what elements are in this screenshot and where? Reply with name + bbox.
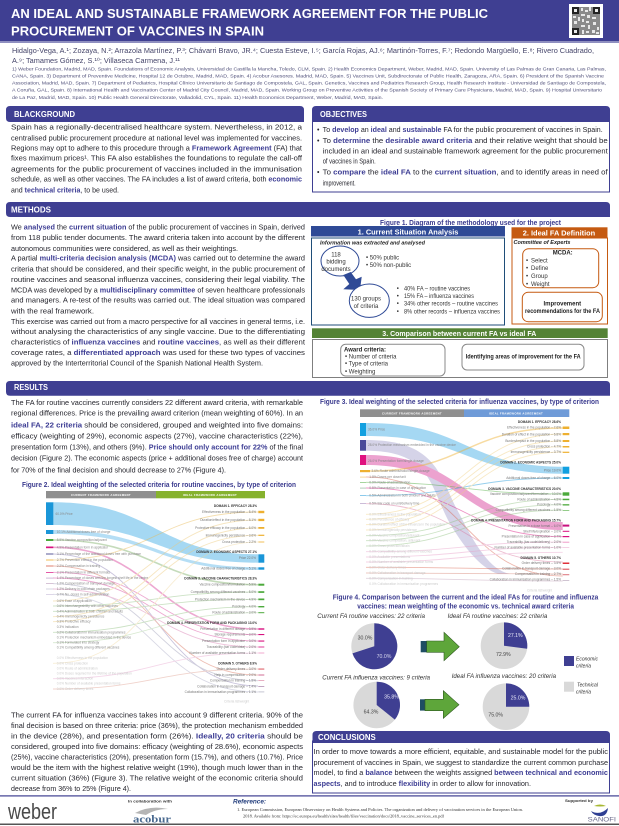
left labels: 0.5% Bar code on unit/delivery time xyxy=(369,502,420,506)
heading: background xyxy=(6,106,304,122)
pie: ideal routine: 27.1% xyxy=(508,633,523,639)
left labels: 26.0% Presentation form/single-dosage xyxy=(368,459,424,463)
text block: results routine: for 70% of the final decision and should decrease to 27% (Figure 4). xyxy=(11,467,226,474)
text block: methods: and managers. A re-test of the results was carried out. The ideal situation was compared xyxy=(11,298,305,305)
text block: background: fixes maximum prices¹. This FA also establishes the foundations to regulate the call-off xyxy=(11,156,302,163)
left labels: 0.0% Effectiveness in the population xyxy=(57,656,108,660)
footer xyxy=(0,795,619,826)
logo: sanofi: SANOFI xyxy=(588,817,616,824)
left labels: 4.9% Presentation form in applicator xyxy=(57,545,109,549)
right labels: Route of administration – 3.0% xyxy=(212,611,256,615)
panel: conclusions xyxy=(312,731,610,793)
figure 3: influenza vaccines sankey: IDEAL FRAMEWORK AGREEMENT xyxy=(489,412,543,416)
left labels: 3.6% Route administration/single-dosage xyxy=(372,469,430,473)
left labels: 0.0% Duration effect of the influenza in the population xyxy=(369,523,445,527)
panel: current situation analysis: 40% FA – routine vaccines xyxy=(404,287,470,293)
figure 4 title: vaccines: mean weighting of the economic vs. technical award criteria xyxy=(357,602,575,610)
text block: methods: coverage rates, a differentiated approach was used for these two types of vaccines xyxy=(11,350,306,357)
right labels: Additional doses free of charge – 6.0% xyxy=(506,476,561,480)
panel: current situation analysis: • xyxy=(397,302,399,308)
figure 3: influenza vaccines sankey: CURRENT FRAMEWORK AGREEMENT xyxy=(382,412,442,416)
panel: current situation analysis: 118 xyxy=(331,252,341,258)
text block: results routine: ideal FA, 22 criteria should be considered, grouped and weighted into five domains: xyxy=(11,422,303,429)
logo: acobur: acobur xyxy=(133,814,171,826)
right labels: Presentation form in applicator – 3.0% xyxy=(202,639,256,643)
panel: current situation analysis: of criteria xyxy=(354,304,379,310)
left labels: 0.6% Interchangeability with other vaccines xyxy=(57,604,118,608)
right labels xyxy=(167,504,257,704)
left labels: 0.0% Order delivery times xyxy=(369,565,406,569)
logo: acobur: In collaboration with xyxy=(128,800,172,804)
logo: sanofi: Supported by xyxy=(565,799,593,803)
panel: background xyxy=(6,106,304,194)
right labels: Posology – 4.0% xyxy=(232,605,256,609)
right labels: DOMAIN 4. PRESENTATION FORM AND PACKAGING 13.0% xyxy=(167,621,257,625)
text block: results routine xyxy=(11,400,303,474)
affiliations xyxy=(12,67,606,101)
right labels: Vaccine composition/formulation – 5.9% xyxy=(200,583,256,587)
left labels: 0.2% Collaboration in immunisation programmes xyxy=(57,630,126,634)
left labels: 3.1% Percentage of the additional doses free with purchase xyxy=(57,552,141,556)
right bars xyxy=(563,426,569,580)
reference: 2018. Available from: https://ec.europa.eu/health/sites/health/files/vaccination/docs/2018_vaccine_services_en.pdf xyxy=(243,815,445,819)
panel: ideal FA definition: Improvement xyxy=(543,301,581,307)
text block: objectives: • xyxy=(317,138,320,145)
panel: current situation analysis: bidding xyxy=(326,260,346,266)
panel: current situation analysis: Information was extracted and analysed xyxy=(320,240,425,246)
heading: background: BLACKGROUND xyxy=(14,110,75,119)
pie: current routine: 30.0% xyxy=(358,636,373,642)
title xyxy=(11,7,488,38)
panel: ideal FA definition: recommendations for the FA xyxy=(525,309,601,315)
affiliations: Association, Madrid, MAD, Spain. 7) Department of Pediatrics, Hospital Clínico Universitario de Santiago de Compostela, GAL, Spain. Genetics, Vaccines and Pediatrics Research Group, Health Research Institute - Universidad de Santiago de Compostela, xyxy=(12,80,606,86)
left labels: 0.0% Collaboration in transport damage xyxy=(369,571,426,575)
left labels: 10.1% Additional doses free of charge xyxy=(57,530,111,534)
left labels: 0.4% Immunogenicity persistence xyxy=(57,615,105,619)
text block: methods xyxy=(10,225,306,368)
right labels: Number of available presentation forms – 1.1% xyxy=(190,651,256,655)
heading: objectives xyxy=(312,106,610,122)
left labels: 0.1% Compatibility among different vaccines xyxy=(57,646,120,650)
figure 2: routine vaccines sankey xyxy=(22,480,296,704)
right labels: Route of administration – 4.5% xyxy=(517,497,561,501)
text block: results routine: regional differences. Price is the prevailing award criterion (mean weighting of 60%). In an xyxy=(11,411,303,418)
figure 4 title xyxy=(333,592,599,610)
text block: objectives: • xyxy=(317,170,320,177)
pie: ideal routine: Ideal FA routine vaccines: 22 criteria xyxy=(448,613,548,620)
left labels: 0.0% Persistence of efficacy xyxy=(369,517,410,521)
heading: results xyxy=(6,381,610,396)
panel: current situation analysis: • 50% non-public xyxy=(366,263,411,269)
panel: ideal FA definition xyxy=(512,227,608,324)
text block: results routine: efficacy (weighting of 29%), economic aspects (27%), vaccine characteristics (22%), xyxy=(11,433,303,440)
panel: comparison: Award criteria: xyxy=(344,347,386,353)
panel: ideal FA definition: Define xyxy=(531,266,549,272)
right labels: Storage requirements – 3.0% xyxy=(215,633,256,637)
text block: background xyxy=(11,125,302,194)
authors xyxy=(12,48,594,65)
panel: current situation analysis: 1. Current Situation Analysis xyxy=(358,227,458,236)
text block: results influenza: would be the item with the highest relative weight (19%), though much lower than in the xyxy=(10,765,303,772)
right labels: Presentation in different dosage – 3.9% xyxy=(200,627,256,631)
legend xyxy=(564,656,599,696)
left labels: 0.4% Administration in both children and adults xyxy=(57,609,123,613)
right labels: Presentation in case of application – 3.7% xyxy=(502,535,561,539)
panel: current situation analysis: • 50% public xyxy=(366,256,399,262)
text block: background: Regions may opt to adhere to this procedure through a Framework Agreement (FA) that xyxy=(11,146,302,153)
text block: conclusions: model, to find a balance between the weights assigned between technical and economic xyxy=(314,770,608,777)
left labels: 1.2% Compensation of transport damage xyxy=(57,582,115,586)
header banner xyxy=(0,0,619,43)
pie: current influenza xyxy=(322,674,431,728)
right labels: Order delivery times – 3.0% xyxy=(217,667,256,671)
affiliations: CANA, Spain. 3) Department of Preventive Medicine, Hospital 12 de Octubre, Madrid, MAD, Spain. 4) Acobur Asesores. Madrid, MAD, Spain. 5) Vaccines Unit, Subdirectorate of Public Health, Zaragoza, ARA, Spain. 6) President of the Spanish Vaccine xyxy=(12,74,604,80)
title: AN IDEAL AND SUSTAINABLE FRAMEWORK AGREEMENT FOR THE PUBLIC xyxy=(11,7,488,21)
heading: conclusions xyxy=(312,731,610,743)
panel: current situation analysis xyxy=(311,226,505,325)
right labels: Burden/impact in the population – 5.8% xyxy=(505,439,561,443)
right labels: Criteria list/weight xyxy=(527,588,552,592)
right labels: Cross protection – 4.7% xyxy=(527,445,561,449)
left labels: 0.0% Available presentations xyxy=(369,555,411,559)
left labels: 1.4% Percentage of doses with the longest shelf life in the centre xyxy=(57,576,148,580)
right labels: Compensation in training – 2.7% xyxy=(515,572,561,576)
panel: ideal FA definition: • xyxy=(526,259,528,265)
legend: criteria xyxy=(576,663,591,669)
right labels: Compatibility among different vaccines – 5.0% xyxy=(191,590,256,594)
text block: methods: We analysed the current situation of the public procurement of vaccines in Spain, derived xyxy=(11,225,305,232)
right labels: Collaboration in immunisation programmes – 1.1% xyxy=(185,690,256,694)
text block: objectives: • xyxy=(317,127,320,134)
text block: background: and technical criteria, to be used. xyxy=(11,187,119,194)
logo: weber: weber xyxy=(7,799,57,824)
right labels: Posology – 4.0% xyxy=(537,503,561,507)
text block: objectives: improvement. xyxy=(323,181,356,188)
panel: comparison: • Type of criteria xyxy=(345,362,389,368)
affiliations: de La Paz, Madrid, MAD, Spain. 10) Public Health General Directorate, Valladolid, CYL, Spain. 11) Health Economics Department, Weber, Madrid, MAD, Spain. xyxy=(12,95,383,101)
text block: conclusions: procurement of vaccines in Spain, we suggest to standardize the current common purchase xyxy=(314,760,608,767)
authors: A.⁹; Tamames Gómez, S.¹⁰; Villaseca Carmena, J.¹¹ xyxy=(12,57,181,65)
arrow: influenza current to ideal xyxy=(420,691,459,718)
text block: methods: criteria that should be considered, and their specific weight, in the public procurement of xyxy=(11,266,305,273)
arrow: routine current to ideal xyxy=(421,632,459,661)
right labels: Additional doses free of charge – 5.1% xyxy=(201,567,256,571)
right labels xyxy=(471,420,561,592)
pie: ideal influenza: Ideal FA influenza vaccines: 20 criteria xyxy=(452,673,557,680)
right labels: Collaboration in transport damage – 1.4% xyxy=(197,684,256,688)
pie: ideal influenza xyxy=(452,673,557,730)
right labels: Order delivery times – 3.5% xyxy=(522,561,561,565)
left labels: 2.1% Presentation in different formats xyxy=(57,570,110,574)
left labels: 1.8% Doses per dose/unit xyxy=(369,475,406,479)
left labels: 2.2% Compensation in training xyxy=(57,564,100,568)
panel: current situation analysis: 130 groups xyxy=(351,296,381,302)
text block: results influenza: in the device (28%), and presentation form (26%). Ideally, 20 criteria should be xyxy=(11,734,303,741)
left labels: 0.5% Presentation in case of application xyxy=(369,486,426,490)
text block: results influenza: (25%), vaccine characteristics (20%), presentation form (15.7%), and others (10.7%). Price xyxy=(11,755,303,762)
right labels: Traceability (bar code/data) – 2.0% xyxy=(206,645,256,649)
right labels: Immunogenicity persistence – 3.7% xyxy=(511,450,561,454)
panel: ideal FA definition: MCDA: xyxy=(553,251,573,257)
left labels: 0.0% Number of available presentation forms xyxy=(369,560,433,564)
left labels: 0.0% Order delivery times xyxy=(57,687,94,691)
pie: ideal routine: 72.9% xyxy=(496,652,511,658)
text block: background: agreements for the public procurement of vaccines included in the immunisation xyxy=(11,166,302,173)
panel: comparison: Identifying areas of improvement for the FA xyxy=(466,354,581,360)
panel: ideal FA definition: • xyxy=(526,266,528,272)
text block: results influenza xyxy=(10,713,304,793)
right labels: Duration of effect in the population – 6.8% xyxy=(502,432,561,436)
text block: methods: autonomous communities were considered, as well as their weightings. xyxy=(11,246,238,253)
logo: sanofi xyxy=(565,799,616,824)
left labels: 5.9% Vaccine composition/adjuvant xyxy=(57,538,107,542)
left labels: 0.0% Cross-protection/strain xyxy=(369,544,410,548)
panel: comparison xyxy=(312,328,608,378)
text block: results influenza: final decision is based on three criteria: price (36%), the protection mechanism embedded xyxy=(11,723,303,730)
text block: conclusions: In order to move towards a more efficient, equitable, and sustainable model for the public xyxy=(314,749,609,756)
right labels: DOMAIN 4. PRESENTATION FORM AND PACKAGING 15.7% xyxy=(471,519,561,523)
panel: ideal FA definition: Group xyxy=(531,274,548,280)
left labels: 0.3% Protective efficacy xyxy=(57,620,91,624)
left labels: 0.0% Vaccine composition, adjuvant xyxy=(369,539,420,543)
panel: comparison: 3. Comparison between current FA vs ideal FA xyxy=(382,329,537,338)
legend: criteria xyxy=(576,690,591,696)
pie: ideal influenza: 75.0% xyxy=(488,712,503,718)
left labels: 0.0% Effectiveness in the population xyxy=(369,512,421,516)
heading: objectives: OBJECTIVES xyxy=(320,110,368,119)
logo: acobur xyxy=(128,800,172,826)
left labels: 1.2% Delivery in cold-chain packages xyxy=(57,587,110,591)
text block: background: schedule, as well as other vaccines. The FA includes a list of award criteria, both economic xyxy=(11,177,302,184)
panel: ideal FA definition: • xyxy=(526,274,528,280)
text block: objectives: included in an ideal and sustainable framework agreement for the public procurement xyxy=(323,148,608,155)
panel: current situation analysis: documents xyxy=(321,267,351,273)
left labels xyxy=(56,512,148,691)
text block: results influenza: considered, grouped into five domains: efficacy (weighting of 28.6%), economic aspects xyxy=(11,744,304,751)
legend: Technical xyxy=(577,683,599,689)
panel: ideal FA definition: 2. Ideal FA Definition xyxy=(523,228,596,238)
pie: current routine: 70.0% xyxy=(377,654,392,660)
right labels: Duration/effect in the population – 8.1% xyxy=(200,518,256,522)
text block: objectives xyxy=(317,127,608,188)
text block: methods: This exercise was carried out from a macro perspective for all vaccines in general terms, i.e. xyxy=(11,319,305,326)
left labels: 0.7% No. doses in self-administration xyxy=(57,592,110,596)
panel: comparison: • Number of criteria xyxy=(345,354,397,360)
left labels: 0.0% Vaccines interaction xyxy=(57,677,93,681)
pie: current influenza: 64.3% xyxy=(364,710,379,716)
pie: ideal influenza: 25.0% xyxy=(511,696,526,702)
affiliations: 1) Weber Foundation, Madrid, MAD, Spain. Foundations of Economic Analysis, Universidad de Castilla la Mancha, Toledo, CLM, Spain. 2) Health Economics Department, Weber, Madrid, MAD, Spain. University of Las Palmas de Gran Canaria, Las Palmas, xyxy=(12,67,606,73)
left labels: 0.6% Ease of application xyxy=(57,599,92,603)
text block: methods: approved by the Interterritorial Council of the Spanish National Health System. xyxy=(11,361,263,368)
left labels: 0.5% Administration in both children and adults xyxy=(369,494,436,498)
right labels: DOMAIN 3. VACCINE CHARACTERISTICS 20.0% xyxy=(488,487,561,491)
right labels: Price 22.0% xyxy=(239,556,256,560)
text block: conclusions: aspects, and to introduce flexibility in order to allow for innovation. xyxy=(314,781,531,788)
text block: results influenza: current situation (36%) (Figure 3). The relative weight of the economic criteria should xyxy=(11,776,303,783)
panel: ideal FA definition: Committee of Experts xyxy=(514,240,571,246)
heading: methods xyxy=(6,202,610,217)
heading: results: RESULTS xyxy=(14,383,49,392)
right labels: DOMAIN 1. EFFICACY 28.3% xyxy=(214,504,257,508)
pie: current routine: Current FA routine vaccines: 22 criteria xyxy=(317,613,426,620)
text block: methods: from 118 public tender documents. The award criteria taken into account by the different xyxy=(11,235,305,242)
panel: current situation analysis: 8% other records – influenza vaccines xyxy=(404,310,500,316)
figure 4: economic vs technical pies xyxy=(317,592,599,730)
text block: background: Spain has a regionally-decentralised healthcare system. Nevertheless, in 2012, a xyxy=(11,125,302,132)
reference: Reference: xyxy=(233,798,266,806)
text block: methods: with the real framework. xyxy=(10,308,94,315)
right labels: Compensation in training – 1.5% xyxy=(210,679,256,683)
right labels: Criteria list/weight xyxy=(224,700,249,704)
text block: results routine: presentation form (13%), and others (9%). Price should only account for 22% of the final xyxy=(11,445,303,452)
pie: ideal routine xyxy=(448,613,548,669)
figure 3: influenza vaccines sankey xyxy=(320,397,599,592)
right labels: Collaboration in immunisation programmes – 1.5% xyxy=(490,578,561,582)
text block: results influenza: decrease from 36% to 25% (Figure 4). xyxy=(11,786,131,793)
left labels: 0.0% Number of available presentation forms xyxy=(57,682,121,686)
left labels xyxy=(368,428,456,586)
left labels: 0.0% Cross protection xyxy=(57,661,88,665)
left labels: 0.0% Vaccine composition/adjuvant xyxy=(369,534,419,538)
left bars xyxy=(46,502,53,594)
right labels: DOMAIN 2. ECONOMIC ASPECTS 27.1% xyxy=(196,550,257,554)
right labels: Presentation in a dose format – 6.0% xyxy=(509,524,561,528)
panel: current situation analysis: • xyxy=(397,294,399,300)
title: PROCUREMENT OF VACCINES IN SPAIN xyxy=(11,24,264,38)
left labels: 0.0% Route of administration xyxy=(57,666,98,670)
left labels: 0.0% Compensation in training xyxy=(369,576,413,580)
panel: ideal FA definition: • xyxy=(526,282,528,288)
text block: methods: A partial multi-criteria decision analysis (MCDA) was carried out to determine the award xyxy=(11,256,305,263)
text block: objectives: To determine the desirable award criteria and their relative weight that should be xyxy=(323,138,608,145)
right labels: Protective efficacy in the population – 6.0% xyxy=(195,526,256,530)
panel: current situation analysis: • xyxy=(397,310,399,316)
left labels: 36.0% Price xyxy=(368,428,385,432)
affiliations: A Coruña, GAL, Spain. 8) International Health and Vaccination Center of Madrid City Council, Madrid, MAD, Spain. Working Group on Preventive Activities of the Spanish Society of Primary Care Physicians, Madrid, MAD, Spain. 9) Hospital Universitario xyxy=(12,88,602,94)
authors: Hidalgo-Vega, A.¹; Zozaya, N.²; Arrazola Martínez, P.³; Chávarri Bravo, JR.⁴; Cuesta Esteve, I.⁵; García Rojas, AJ.⁶; Martinón-Torres, F.⁷; Redondo Margüello, E.⁸; Rivero Cuadrado, xyxy=(12,48,594,55)
heading: methods: METHODS xyxy=(11,206,52,214)
right labels: DOMAIN 3. VACCINE CHARACTERISTICS 28.3% xyxy=(184,576,257,580)
reference xyxy=(233,798,523,819)
right bars xyxy=(258,511,264,692)
right labels: Number of available presentation forms – 1.0% xyxy=(495,545,561,549)
right labels: Effectiveness in the population – 7.6% xyxy=(507,426,561,430)
right labels: Protection mechanism in the device – 4.9% xyxy=(195,597,256,601)
right labels: DOMAIN 5. OTHERS 8.9% xyxy=(218,661,257,665)
text block: objectives: To develop an ideal and sustainable FA for the public procurement of vaccines in Spain. xyxy=(323,127,603,134)
right labels: Traceability (bar code/delivery) – 2.0% xyxy=(507,540,561,544)
left labels: 28.0% Protection mechanism embedded in the vaccine device xyxy=(368,443,456,447)
left labels: 0.0% Collaboration in immunisation programmes xyxy=(369,582,438,586)
panel: current situation analysis: • xyxy=(397,287,399,293)
right labels: Compatibility among different vaccines – 1.5% xyxy=(496,508,561,512)
legend: Economic xyxy=(576,657,598,663)
figure 1: methodology diagram xyxy=(311,218,608,378)
panel: current situation analysis: 34% other records – routine vaccines xyxy=(404,302,498,308)
reference: 1. European Commission, European Observatory on Health Systems and Policies. The organization and delivery of vaccination services in the European Union. xyxy=(237,808,523,813)
icon: QR code xyxy=(569,4,603,38)
text block: results routine: The FA for routine vaccines currently considers 22 different award criteria, with remarkable xyxy=(11,400,303,407)
left labels: 0.1% Formulated into strategy xyxy=(57,641,100,645)
right labels: Help in compensation – 2.0% xyxy=(215,673,256,677)
text block: methods: routine vaccines and seasonal influenza vaccines, considering their legal viability. The xyxy=(11,277,305,284)
figure 2: routine vaccines sankey: CURRENT FRAMEWORK AGREEMENT xyxy=(71,493,131,497)
panel: ideal FA definition: Select xyxy=(531,259,548,265)
left labels: 0.9% Route of administration xyxy=(369,480,410,484)
right labels: Effectiveness in the population – 8.4% xyxy=(202,510,256,514)
left labels: 60.0% Price xyxy=(56,512,73,516)
right labels: Price 19.0% xyxy=(544,468,561,472)
left labels: 0.3% Indication xyxy=(57,625,79,629)
right labels: DOMAIN 5. OTHERS 10.7% xyxy=(520,556,561,560)
pie: current routine xyxy=(317,613,426,669)
text block: conclusions xyxy=(314,749,609,788)
text block: methods: MCDA was developed by a multidisciplinary committee of seven healthcare professionals xyxy=(11,287,306,294)
right labels: Immunogenicity persistence – 3.6% xyxy=(206,533,256,537)
heading: conclusions: CONCLUSIONS xyxy=(318,733,376,742)
text block: methods: characteristics of influenza vaccines and routine vaccines , as well as their different xyxy=(11,340,305,347)
left labels: 0.0% Compatibility among different vaccines xyxy=(369,550,432,554)
left labels: 0.0% Doses required for the lifetime of the population xyxy=(57,672,132,676)
panel: comparison: • Weighting xyxy=(345,369,375,375)
right labels: Vaccine composition/adjuvant/formulation – 10.0% xyxy=(490,492,561,496)
right labels: DOMAIN 2. ECONOMIC ASPECTS 25.0% xyxy=(500,460,561,464)
left labels: 0.1% Protection mechanism embedded in the device xyxy=(57,636,131,640)
pie: current influenza: 35.8% xyxy=(384,695,399,701)
figure 2: routine vaccines sankey: IDEAL FRAMEWORK AGREEMENT xyxy=(183,493,237,497)
text block: results routine: decision (Figure 2). The economic aspects (price + additional doses free of charge) account xyxy=(11,456,303,463)
right labels: Collaboration in transport damage – 3.0% xyxy=(502,567,561,571)
left labels: 0.0% Immunogenicity persistence xyxy=(369,528,417,532)
figure 1 title: Figure 1. Diagram of the methodology used for the project xyxy=(380,218,561,227)
panel: current situation analysis: 15% FA – influenza vaccines xyxy=(404,294,474,300)
text block: objectives: To compare the ideal FA to the current situation , and to identify areas in need of xyxy=(323,170,608,177)
right labels: Cross protection – 2.2% xyxy=(222,540,256,544)
text block: background: centralised public procurement procedure at national level was implemented for vaccines. xyxy=(11,135,302,142)
panel: objectives xyxy=(312,106,610,192)
left labels: 2.7% Prevention effect in the population xyxy=(57,558,113,562)
right labels: DOMAIN 1. EFFICACY 28.6% xyxy=(518,420,561,424)
panel: ideal FA definition: Weight xyxy=(531,282,550,288)
pie: current influenza: Current FA influenza vaccines: 9 criteria xyxy=(322,674,431,682)
text block: methods: without analysing the characteristics of any single vaccine. Due to the differentiating xyxy=(10,329,305,336)
right labels: Shelf life/expiration – 3.0% xyxy=(523,529,561,533)
text block: objectives: of vaccines in Spain. xyxy=(323,159,376,166)
left bars xyxy=(360,423,370,504)
figure 2 title: Figure 2. Ideal weighting of the selected criteria for routine vaccines, by type of criterion xyxy=(22,480,296,489)
text block: results influenza: The current FA for influenza vaccines takes into account 9 different criteria. 90% of the xyxy=(11,713,303,720)
